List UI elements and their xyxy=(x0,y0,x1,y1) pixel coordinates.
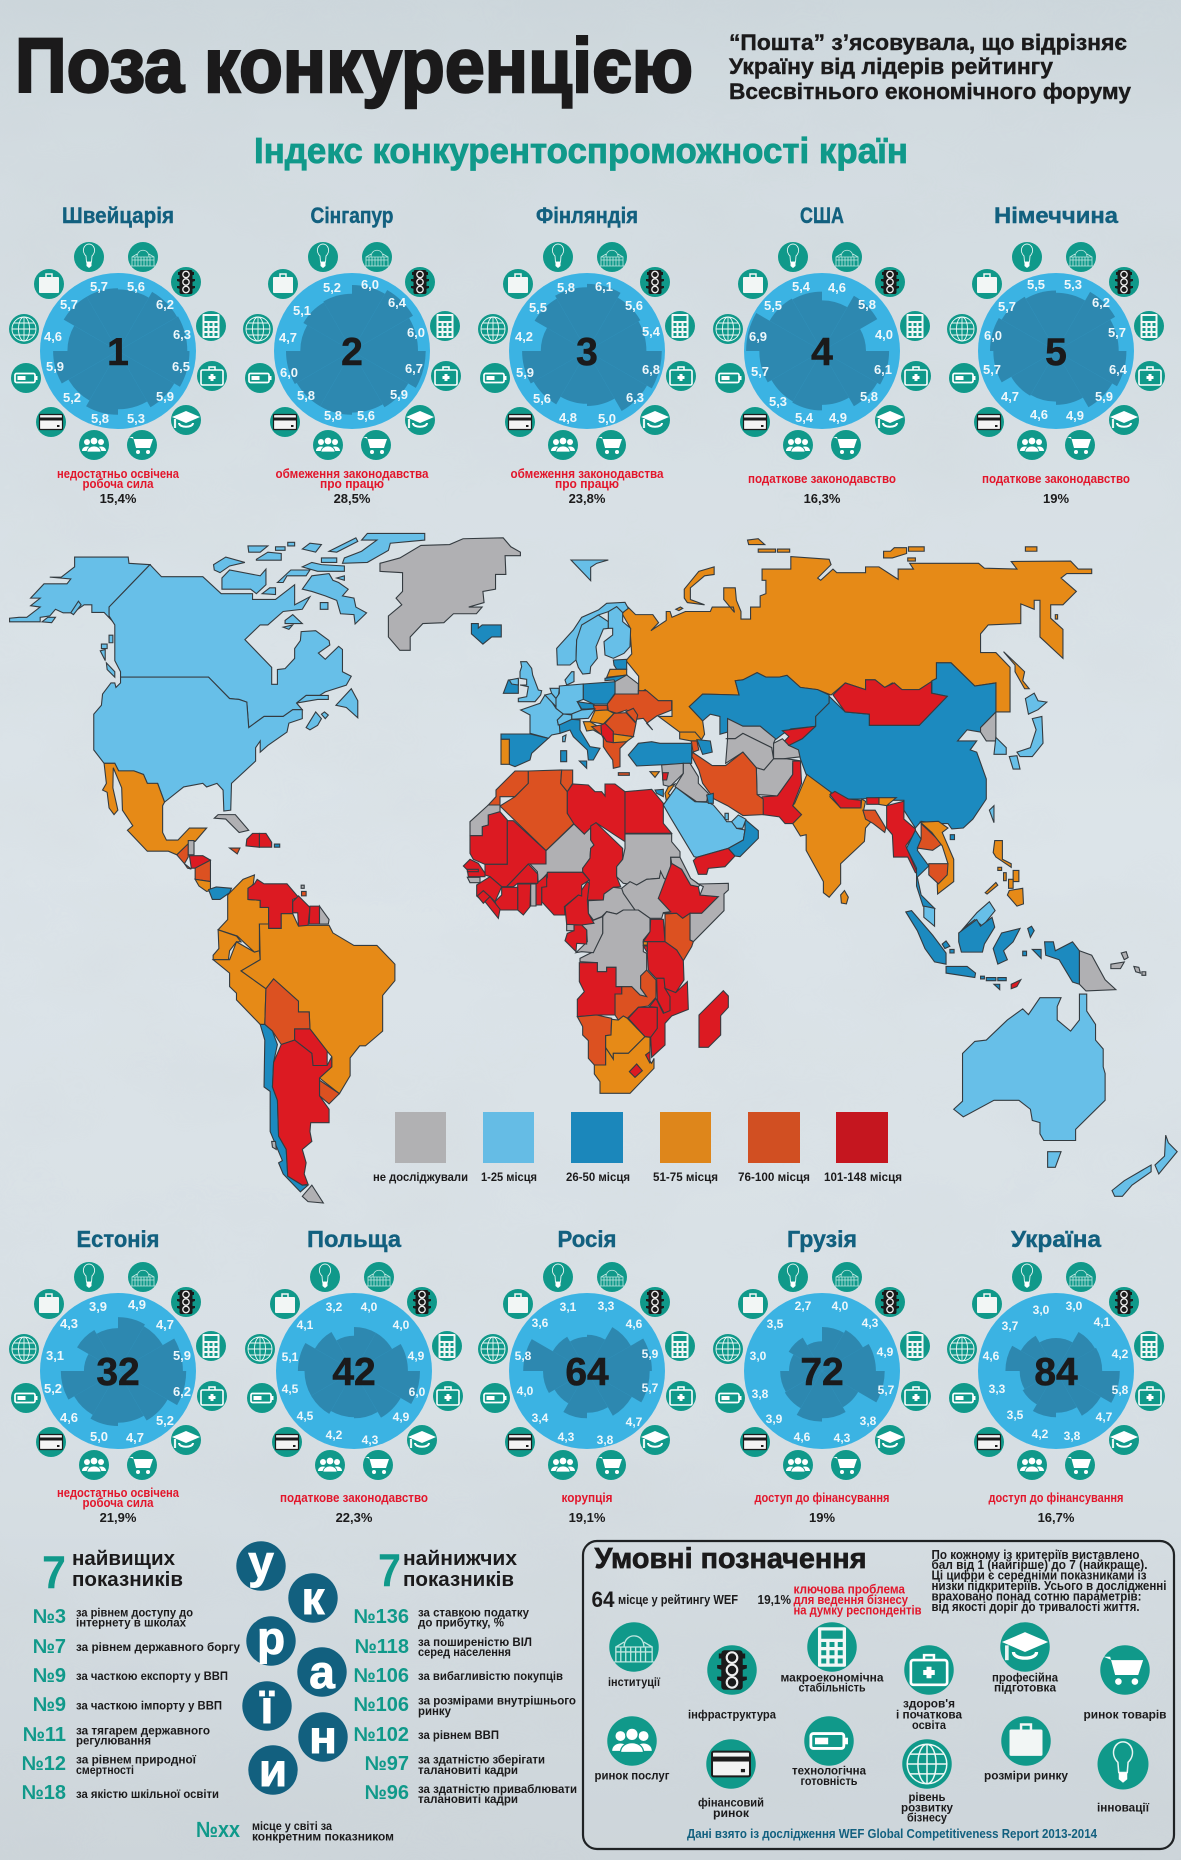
dial: Німеччина: 5,5 xyxy=(1027,277,1045,292)
dial: Польща: 4,2 xyxy=(326,1428,343,1442)
dial: Швейцарія: 5,6 xyxy=(127,279,145,294)
dial: Росія: Росія xyxy=(558,1226,616,1252)
dial: Польща: 4,9 xyxy=(408,1349,425,1363)
dial: Польща: 4,1 xyxy=(297,1318,314,1332)
dial: Росія: 64 xyxy=(565,1351,609,1394)
dial: Сінгапур: 4,7 xyxy=(279,330,297,345)
dial: Україна: 4,1 xyxy=(1094,1315,1111,1329)
dial: США: 4 xyxy=(811,331,833,374)
dial: Росія: 3,1 xyxy=(560,1300,577,1314)
dial: Росія: 4,7 xyxy=(626,1415,643,1429)
dial: Польща: 5,1 xyxy=(282,1350,299,1364)
icon: здоров'я: освіта xyxy=(912,1718,946,1732)
dial: Естонія: Естонія xyxy=(76,1226,160,1252)
icon: розміри ринку xyxy=(984,1716,1068,1782)
dial: Грузія: 72 xyxy=(800,1351,844,1394)
dial: Грузія: 4,3 xyxy=(862,1316,879,1330)
dial: США: 5,5 xyxy=(764,298,782,313)
Україна letter circles: к xyxy=(301,1572,325,1624)
dial: Німеччина: Німеччина xyxy=(994,203,1119,228)
dial: Росія: 5,8 xyxy=(515,1349,532,1363)
note: №xx key: №хх xyxy=(196,1817,241,1842)
dial: Грузія: Грузія xyxy=(787,1226,857,1252)
dial: Фінляндія: 5,6 xyxy=(625,298,643,313)
panel: lowest 7 indicators: талановиті кадри xyxy=(418,1792,518,1806)
dial: Німеччина: 5 xyxy=(1045,331,1067,374)
panel: lowest 7 indicators: №97 xyxy=(364,1753,409,1775)
panel: lowest 7 indicators: №118 xyxy=(354,1636,409,1658)
panel: lowest 7 indicators: за вибагливістю покупців xyxy=(418,1669,563,1683)
dial: Швейцарія: робоча сила xyxy=(82,477,154,491)
note: №xx key: місце у світі за xyxy=(252,1819,332,1833)
dial: Німеччина: 4,7 xyxy=(1001,389,1019,404)
dial: Польща: 4,0 xyxy=(361,1300,378,1314)
panel: top 7 indicators: регулювання xyxy=(76,1734,151,1748)
dial: Грузія: 5,7 xyxy=(878,1383,895,1397)
panel: top 7 indicators xyxy=(21,1546,240,1804)
panel: top 7 indicators: показників xyxy=(72,1569,183,1591)
dial: Німеччина: 5,7 xyxy=(983,362,1001,377)
dial: Сінгапур: 6,4 xyxy=(388,295,407,310)
dial: Німеччина: 5,9 xyxy=(1095,389,1113,404)
icon: професійна підготовка: професійна xyxy=(992,1670,1058,1684)
legend paragraph xyxy=(932,1547,1166,1614)
icon: фінансовий ринок xyxy=(698,1739,764,1820)
legend problem key: для ведення бізнесу xyxy=(794,1592,909,1607)
panel: top 7 indicators: за часткою імпорту у ВВП xyxy=(76,1698,222,1712)
title: Поза конкуренцією xyxy=(15,23,693,109)
dial: Грузія: 4,3 xyxy=(834,1431,851,1445)
dial: Грузія: 4,6 xyxy=(794,1430,811,1444)
subtitle block xyxy=(729,30,1132,104)
dial: Швейцарія: 15,4% xyxy=(100,491,137,506)
dial: Німеччина: 19% xyxy=(1043,491,1069,506)
dial: Фінляндія xyxy=(478,203,696,506)
icon: рівень розвитку бізнесу: розвитку xyxy=(901,1800,953,1814)
panel: lowest 7 indicators: серед населення xyxy=(418,1645,511,1659)
icon: ринок товарів xyxy=(1084,1645,1166,1722)
dial: Сінгапур: обмеження законодавства xyxy=(276,467,429,481)
panel: top 7 indicators: №7 xyxy=(33,1636,66,1658)
dial: Швейцарія xyxy=(9,203,227,506)
dial: Фінляндія: Фінляндія xyxy=(536,203,638,228)
dial: Фінляндія: 4,2 xyxy=(515,329,533,344)
dial: Швейцарія: 5,3 xyxy=(127,411,145,426)
world map xyxy=(10,533,1177,1203)
dial: Фінляндія: 5,5 xyxy=(529,300,547,315)
dial: Польща: 4,3 xyxy=(362,1433,379,1447)
dial: Сінгапур: 6,0 xyxy=(407,325,425,340)
dial: Сінгапур: 5,1 xyxy=(293,303,311,318)
dial: Фінляндія: 5,8 xyxy=(557,280,575,295)
dial: Естонія: недостатньо освічена xyxy=(57,1486,180,1500)
dial: Сінгапур xyxy=(243,203,461,506)
dial: Швейцарія: 6,5 xyxy=(172,359,190,374)
panel: top 7 indicators: №11 xyxy=(23,1724,66,1746)
panel: lowest 7 indicators: до прибутку, % xyxy=(418,1616,504,1630)
dial: Україна: 3,0 xyxy=(1033,1303,1050,1317)
icon: ринок товарів: ринок товарів xyxy=(1084,1708,1166,1722)
icon: інфраструктура xyxy=(688,1645,776,1722)
dial: США: 4,9 xyxy=(829,410,847,425)
dial: Грузія: доступ до фінансування xyxy=(754,1491,890,1505)
map: Africa and Arabia xyxy=(463,770,758,1093)
subtitle block: Всесвітнього економічного форуму xyxy=(729,79,1132,104)
dial: Фінляндія: 5,9 xyxy=(516,365,534,380)
dial: Росія: 5,9 xyxy=(642,1347,659,1361)
dial: Швейцарія: 5,9 xyxy=(46,359,64,374)
icon: здоров'я: здоров'я xyxy=(903,1696,955,1710)
dial: Естонія: 5,2 xyxy=(156,1413,174,1428)
dial: Фінляндія: 6,3 xyxy=(626,390,644,405)
dial: Сінгапур: Сінгапур xyxy=(310,203,394,228)
legend problem key: ключова проблема xyxy=(794,1582,906,1596)
panel: top 7 indicators: №12 xyxy=(21,1753,66,1775)
dial: Швейцарія: 6,2 xyxy=(156,297,174,312)
dial: Польща: 4,9 xyxy=(393,1410,410,1424)
map: Asia and Oceania xyxy=(622,539,1177,1196)
panel: top 7 indicators: №18 xyxy=(21,1782,66,1804)
panel: lowest 7 indicators: за рівнем ВВП xyxy=(418,1728,499,1742)
dial: Швейцарія: 5,9 xyxy=(156,389,174,404)
dial: Фінляндія: обмеження законодавства xyxy=(510,467,664,481)
dial: Німеччина: 5,7 xyxy=(1108,325,1126,340)
panel: legend box xyxy=(583,1541,1174,1849)
legend problem key: на думку респондентів xyxy=(794,1602,922,1618)
map legend: 101-148 місця xyxy=(824,1170,902,1184)
subtitle block: Україну від лідерів рейтингу xyxy=(729,54,1054,79)
map legend: 26-50 місця xyxy=(566,1170,630,1184)
icon: ринок послуг xyxy=(594,1716,670,1782)
dial: Сінгапур: 5,9 xyxy=(390,387,408,402)
dial: Польща: 4,5 xyxy=(282,1382,299,1396)
map: North and South America xyxy=(10,533,520,1203)
dial: Росія xyxy=(478,1226,696,1525)
dial: Росія: 4,6 xyxy=(626,1317,643,1331)
dial: Німеччина: 6,0 xyxy=(984,328,1002,343)
dial: Україна: 4,2 xyxy=(1032,1427,1049,1441)
dial: Росія: 4,0 xyxy=(517,1384,534,1398)
dial: Фінляндія: 3 xyxy=(576,331,598,374)
panel: lowest 7 indicators xyxy=(353,1544,577,1806)
dial: Естонія: 5,0 xyxy=(90,1429,108,1444)
panel: top 7 indicators: за рівнем державного боргу xyxy=(76,1640,240,1654)
dial: Німеччина: 5,3 xyxy=(1064,277,1082,292)
panel: top 7 indicators: за тягарем державного xyxy=(76,1724,210,1738)
icon: рівень розвитку бізнесу: рівень xyxy=(908,1790,946,1804)
icon: макроекономічна стабільність: стабільність xyxy=(798,1680,866,1694)
dial: Україна: 3,5 xyxy=(1007,1408,1024,1422)
dial: Фінляндія: 5,0 xyxy=(598,411,616,426)
dial: Грузія: 4,9 xyxy=(877,1345,894,1359)
panel: lowest 7 indicators: №106 xyxy=(353,1665,409,1687)
dial: США: 5,4 xyxy=(792,279,811,294)
icon: технологічна готовність xyxy=(792,1716,866,1788)
dial: Фінляндія: 6,1 xyxy=(595,279,613,294)
dial: Грузія: 3,9 xyxy=(766,1412,783,1426)
legend rank key: місце у рейтингу WEF xyxy=(618,1593,738,1607)
panel: lowest 7 indicators: за ставкою податку xyxy=(418,1606,529,1620)
panel: lowest 7 indicators: №102 xyxy=(353,1724,409,1746)
icon: ринок послуг: ринок послуг xyxy=(594,1768,670,1782)
dial: Німеччина: 6,4 xyxy=(1109,362,1128,377)
dial: США: 16,3% xyxy=(804,491,841,506)
dial: Україна: 4,2 xyxy=(1112,1347,1129,1361)
dial: Росія: 4,3 xyxy=(558,1430,575,1444)
dial: Україна: доступ до фінансування xyxy=(988,1491,1124,1505)
icon: інституції: інституції xyxy=(608,1675,661,1689)
Україна letter circles xyxy=(236,1536,348,1796)
panel: top 7 indicators: найвищих xyxy=(72,1548,175,1570)
dial: Німеччина xyxy=(947,203,1165,506)
dial: Естонія: 6,2 xyxy=(173,1384,191,1399)
icon: технологічна готовність: технологічна xyxy=(792,1764,866,1778)
dial: Естонія: робоча сила xyxy=(82,1496,154,1510)
subtitle block: “Пошта” з’ясовувала, що відрізняє xyxy=(729,30,1127,55)
dial: Сінгапур: 5,8 xyxy=(297,388,315,403)
panel: lowest 7 indicators: ринку xyxy=(418,1704,451,1718)
dial: Фінляндія: 5,6 xyxy=(533,391,551,406)
dial: Польща: 6,0 xyxy=(409,1385,426,1399)
dial: Сінгапур: 2 xyxy=(341,331,363,374)
legend paragraph: від якості доріг до тривалості життя. xyxy=(932,1599,1140,1614)
dial: Сінгапур: про працю xyxy=(320,477,384,491)
dial: Польща: Польща xyxy=(307,1226,401,1252)
dial: Швейцарія: 5,8 xyxy=(91,411,109,426)
dial: Естонія xyxy=(9,1226,227,1525)
panel: top 7 indicators: №3 xyxy=(33,1606,66,1628)
icon: рівень розвитку бізнесу: бізнесу xyxy=(907,1810,947,1824)
dial: Україна: 4,7 xyxy=(1096,1410,1113,1424)
icon: розміри ринку: розміри ринку xyxy=(984,1768,1068,1782)
panel: top 7 indicators: №9 xyxy=(33,1694,66,1716)
dial: Сінгапур: 5,2 xyxy=(323,280,341,295)
icon: інновації: інновації xyxy=(1097,1800,1150,1814)
panel: lowest 7 indicators: за поширеністю ВІЛ xyxy=(418,1635,532,1649)
dial: Швейцарія: 5,7 xyxy=(60,297,78,312)
dial: США: 6,1 xyxy=(874,362,892,377)
map legend: 76-100 місця xyxy=(738,1170,810,1184)
legend paragraph: По кожному із критеріїв виставлено xyxy=(932,1547,1140,1562)
panel: lowest 7 indicators: талановиті кадри xyxy=(418,1763,518,1777)
dial: Фінляндія: 5,4 xyxy=(642,324,661,339)
Україна letter circles: р xyxy=(257,1612,285,1664)
dial: Сінгапур: 6,7 xyxy=(405,361,423,376)
dial: Польща xyxy=(245,1226,463,1525)
Україна letter circles: и xyxy=(259,1744,287,1796)
dial: Грузія: 3,5 xyxy=(767,1317,784,1331)
dial: Сінгапур: 5,6 xyxy=(357,408,375,423)
dial: США: 5,3 xyxy=(769,394,787,409)
icon: професійна підготовка xyxy=(992,1622,1058,1694)
legend rank key: 64 xyxy=(592,1587,615,1612)
legend paragraph: Ці цифри є середніми показниками із xyxy=(932,1568,1147,1582)
dial: Росія: 3,3 xyxy=(598,1299,615,1313)
dial: Україна: 84 xyxy=(1034,1351,1078,1394)
dial: США: США xyxy=(800,203,844,228)
dial: Україна: 5,8 xyxy=(1112,1383,1129,1397)
dial: Естонія: 4,7 xyxy=(126,1430,144,1445)
panel: lowest 7 indicators: №106 xyxy=(353,1694,409,1716)
dial: Грузія xyxy=(713,1226,931,1525)
dial: Польща: 3,2 xyxy=(326,1300,343,1314)
icon: інфраструктура: інфраструктура xyxy=(688,1708,776,1722)
dial: Фінляндія: 6,8 xyxy=(642,362,660,377)
Україна letter circles: ї xyxy=(260,1681,275,1733)
dial: Грузія: 3,0 xyxy=(750,1349,767,1363)
dial: США: 5,8 xyxy=(858,297,876,312)
dial: США: 4,0 xyxy=(875,327,893,342)
heading: index: Індекс конкурентоспроможності країн xyxy=(254,130,908,171)
note: №xx key: конкретним показником xyxy=(252,1830,394,1844)
dial: США xyxy=(713,203,931,506)
dial: Німеччина: 6,2 xyxy=(1092,295,1110,310)
legend rank key xyxy=(592,1587,738,1612)
dial: Росія: 5,7 xyxy=(642,1381,659,1395)
source note: Дані взято із дослідження WEF Global Competitiveness Report 2013-2014 xyxy=(687,1826,1098,1841)
legend heading: Умовні позначення xyxy=(594,1543,866,1575)
dial: Естонія: 4,6 xyxy=(60,1410,78,1425)
panel: lowest 7 indicators: №96 xyxy=(364,1782,409,1804)
dial: Україна: 3,7 xyxy=(1002,1319,1019,1333)
icon: фінансовий ринок: фінансовий xyxy=(698,1796,764,1810)
dial: Естонія: 3,1 xyxy=(46,1348,64,1363)
dial: Сінгапур: 6,0 xyxy=(280,365,298,380)
dial: Швейцарія: 1 xyxy=(107,331,129,374)
dial: Польща: 42 xyxy=(332,1351,376,1394)
dial: Фінляндія: 4,8 xyxy=(559,410,577,425)
map legend: не досліджували xyxy=(373,1170,468,1184)
dial: Швейцарія: недостатньо освічена xyxy=(57,467,180,481)
panel: lowest 7 indicators: за здатністю приваблювати xyxy=(418,1782,577,1796)
dial: Грузія: 2,7 xyxy=(795,1299,812,1313)
dial: Естонія: 5,2 xyxy=(44,1381,62,1396)
Україна letter circles: у xyxy=(248,1536,274,1588)
dial: США: 4,6 xyxy=(828,280,846,295)
dial: Сінгапур: 28,5% xyxy=(334,491,371,506)
dial: Росія: 3,8 xyxy=(597,1433,614,1447)
dial: Грузія: 19% xyxy=(809,1510,835,1525)
dial: Швейцарія: Швейцарія xyxy=(62,203,174,228)
dial: Україна: Україна xyxy=(1011,1226,1101,1252)
dial: Грузія: 3,8 xyxy=(860,1414,877,1428)
icon: професійна підготовка: підготовка xyxy=(994,1680,1056,1694)
dial: Естонія: 4,7 xyxy=(156,1317,174,1332)
legend paragraph: бал від 1 (найгірше) до 7 (найкраще). xyxy=(932,1557,1148,1572)
dial: США: 5,4 xyxy=(795,410,814,425)
dial: Німеччина: 4,9 xyxy=(1066,408,1084,423)
panel: lowest 7 indicators: показників xyxy=(403,1569,514,1591)
dial: Естонія: 3,9 xyxy=(89,1299,107,1314)
Україна letter circles: а xyxy=(309,1646,335,1698)
legend problem key: 19,1% xyxy=(758,1593,791,1607)
dial: Естонія: 5,9 xyxy=(173,1348,191,1363)
dial: Україна: 3,3 xyxy=(989,1382,1006,1396)
dial: Швейцарія: 6,3 xyxy=(173,327,191,342)
legend problem key xyxy=(758,1582,922,1618)
map legend: 51-75 місця xyxy=(653,1170,718,1184)
panel: lowest 7 indicators: №136 xyxy=(353,1606,409,1628)
dial: Естонія: 32 xyxy=(96,1351,140,1394)
panel: top 7 indicators: за рівнем природної xyxy=(76,1752,197,1766)
map legend xyxy=(373,1112,902,1184)
icon: здоров'я xyxy=(896,1645,962,1732)
dial: Грузія: 4,0 xyxy=(832,1299,849,1313)
dial: Польща: 4,5 xyxy=(297,1409,314,1423)
dial: США: 5,8 xyxy=(860,389,878,404)
dial: Фінляндія: 23,8% xyxy=(569,491,606,506)
panel: top 7 indicators: №9 xyxy=(33,1665,66,1687)
icon: макроекономічна стабільність xyxy=(780,1622,884,1694)
dial: Україна xyxy=(947,1226,1165,1525)
dial: Грузія: 3,8 xyxy=(752,1387,769,1401)
dial: Росія: 3,6 xyxy=(532,1316,549,1330)
panel: top 7 indicators: смертності xyxy=(76,1763,134,1777)
icon: макроекономічна стабільність: макроекономічна xyxy=(780,1670,884,1684)
dial: Швейцарія: 5,2 xyxy=(63,390,81,405)
dial: Швейцарія: 4,6 xyxy=(44,329,62,344)
icon: інновації xyxy=(1097,1738,1150,1814)
dial: Україна: 3,0 xyxy=(1066,1299,1083,1313)
Україна letter circles: н xyxy=(309,1711,337,1763)
dial: Німеччина: 4,6 xyxy=(1030,407,1048,422)
icon: технологічна готовність: готовність xyxy=(800,1774,858,1788)
dial: Росія: корупція xyxy=(562,1491,612,1505)
panel: lowest 7 indicators: найнижчих xyxy=(403,1548,517,1570)
icon: фінансовий ринок: ринок xyxy=(713,1806,750,1820)
panel: top 7 indicators: інтернету в школах xyxy=(76,1616,186,1630)
panel: lowest 7 indicators: 7 xyxy=(378,1544,401,1596)
map legend: 1-25 місця xyxy=(481,1170,537,1184)
panel: lowest 7 indicators: за розмірами внутрішнього xyxy=(418,1694,576,1708)
panel: lowest 7 indicators: за здатністю зберігати xyxy=(418,1752,545,1766)
dial: Естонія: 21,9% xyxy=(100,1510,137,1525)
dial: Росія: 3,4 xyxy=(532,1411,549,1425)
dial: Росія: 19,1% xyxy=(569,1510,606,1525)
dial: Швейцарія: 5,7 xyxy=(90,279,108,294)
dial: Німеччина: 5,7 xyxy=(998,299,1016,314)
icon: здоров'я: і початкова xyxy=(896,1708,962,1722)
panel: top 7 indicators: 7 xyxy=(42,1546,66,1598)
panel: top 7 indicators: за рівнем доступу до xyxy=(76,1606,193,1620)
dial: Польща: податкове законодавство xyxy=(280,1491,428,1505)
dial: Сінгапур: 6,0 xyxy=(361,277,379,292)
map: Europe xyxy=(501,560,708,803)
icon: рівень розвитку бізнесу xyxy=(901,1739,953,1824)
legend paragraph: враховано понад сотню параметрів: xyxy=(932,1588,1142,1604)
icon: інституції xyxy=(608,1622,661,1689)
dial: Естонія: 4,3 xyxy=(60,1316,78,1331)
dial: Україна: 16,7% xyxy=(1038,1510,1075,1525)
dial: Німеччина: податкове законодавство xyxy=(982,472,1130,486)
dial: Естонія: 4,9 xyxy=(128,1297,146,1312)
dial: Фінляндія: про працю xyxy=(555,477,619,491)
dial: Сінгапур: 5,8 xyxy=(324,408,342,423)
dial: Україна: 3,8 xyxy=(1064,1429,1081,1443)
note: №xx key xyxy=(196,1817,394,1844)
dial: США: податкове законодавство xyxy=(748,472,896,486)
dial: США: 6,9 xyxy=(749,329,767,344)
panel: top 7 indicators: за часткою експорту у ВВП xyxy=(76,1669,228,1683)
dial: Україна: 4,6 xyxy=(983,1349,1000,1363)
panel: top 7 indicators: за якістю шкільної освіти xyxy=(76,1787,219,1801)
dial: США: 5,7 xyxy=(751,364,769,379)
dial: Польща: 4,0 xyxy=(393,1318,410,1332)
dial: Польща: 22,3% xyxy=(336,1510,373,1525)
